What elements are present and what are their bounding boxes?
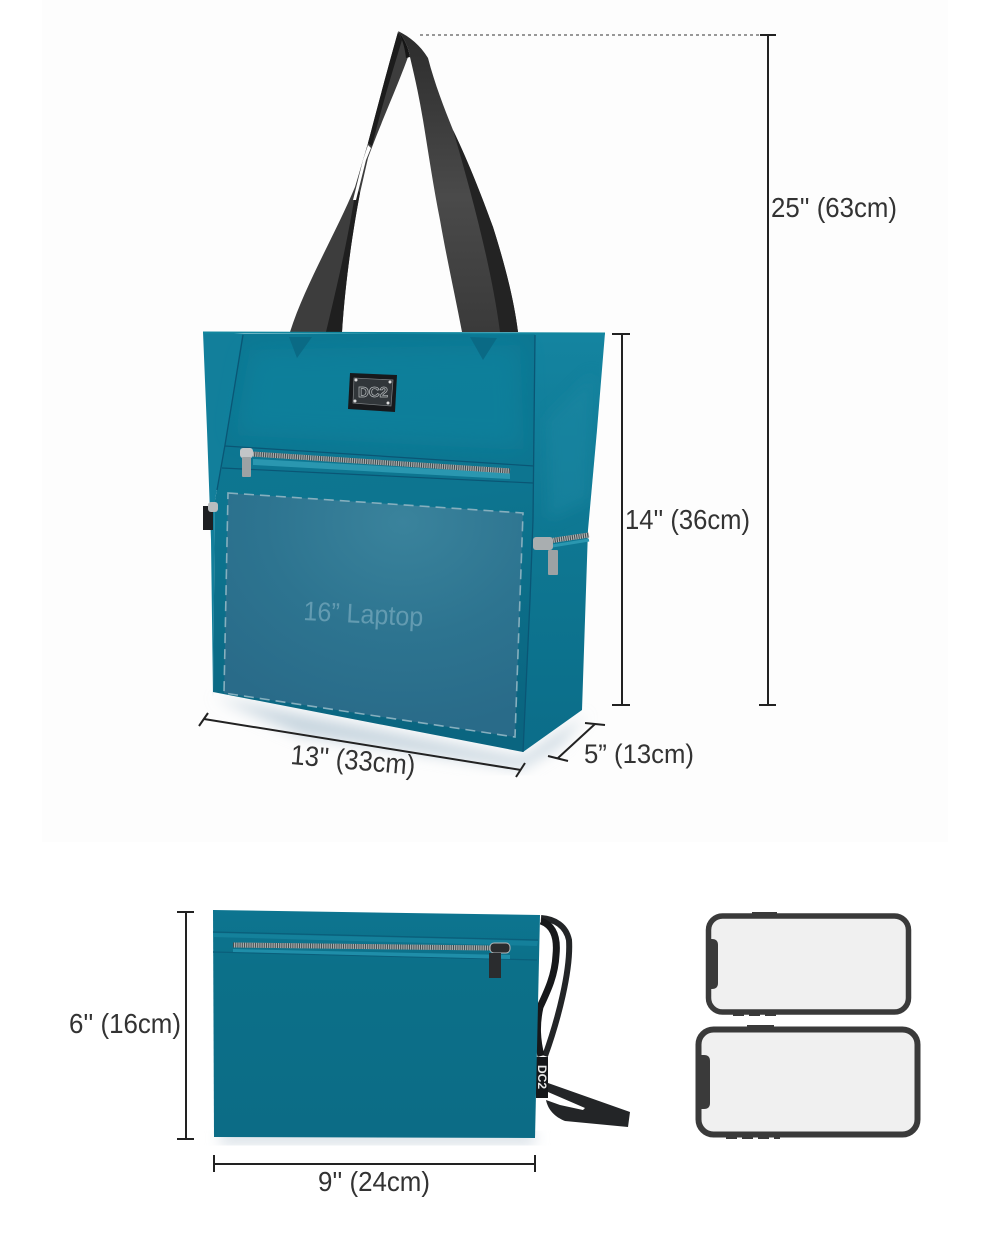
bag shadow <box>214 697 586 768</box>
strap label <box>536 1057 548 1098</box>
tote bag <box>203 31 605 768</box>
pouch body <box>213 910 540 1138</box>
pouch shadow <box>220 1132 535 1144</box>
icon: small phone <box>708 912 908 1015</box>
logo badge: DC2 <box>358 384 388 401</box>
label: pouch width: 9'' (24cm) <box>318 1166 430 1197</box>
dimension: bag depth <box>548 723 694 769</box>
product photo backdrop <box>42 0 948 842</box>
logo badge <box>348 373 397 412</box>
label: bag width: 13'' (33cm) <box>289 739 417 781</box>
front zipper <box>222 446 534 483</box>
bag front panel <box>213 334 535 752</box>
icon: large phone <box>698 1025 918 1138</box>
pouch wrist strap: DC2 <box>535 1065 549 1089</box>
label: total height: 25'' (63cm) <box>771 192 897 223</box>
pouch wrist strap <box>535 918 630 1127</box>
front handle <box>398 31 518 332</box>
label: bag depth: 5” (13cm) <box>584 739 694 769</box>
pouch <box>213 910 630 1144</box>
dimension: total height <box>420 35 897 705</box>
laptop label: 16” Laptop <box>303 596 424 632</box>
left side zipper pull <box>203 502 218 530</box>
dimension: pouch width <box>214 1155 535 1197</box>
label: bag height: 14'' (36cm) <box>625 504 750 535</box>
bag side gusset right <box>523 333 605 752</box>
dimension: bag width <box>199 713 525 781</box>
seams <box>217 335 535 752</box>
pouch zipper <box>213 932 538 978</box>
right side zipper <box>533 535 589 575</box>
handle tabs <box>289 337 497 360</box>
label: pouch height: 6'' (16cm) <box>69 1008 181 1039</box>
laptop outline <box>224 493 523 737</box>
back handle <box>290 32 408 332</box>
dimension: bag height <box>612 334 750 705</box>
dimension: pouch height <box>69 912 194 1139</box>
bag side gusset left <box>203 332 244 697</box>
